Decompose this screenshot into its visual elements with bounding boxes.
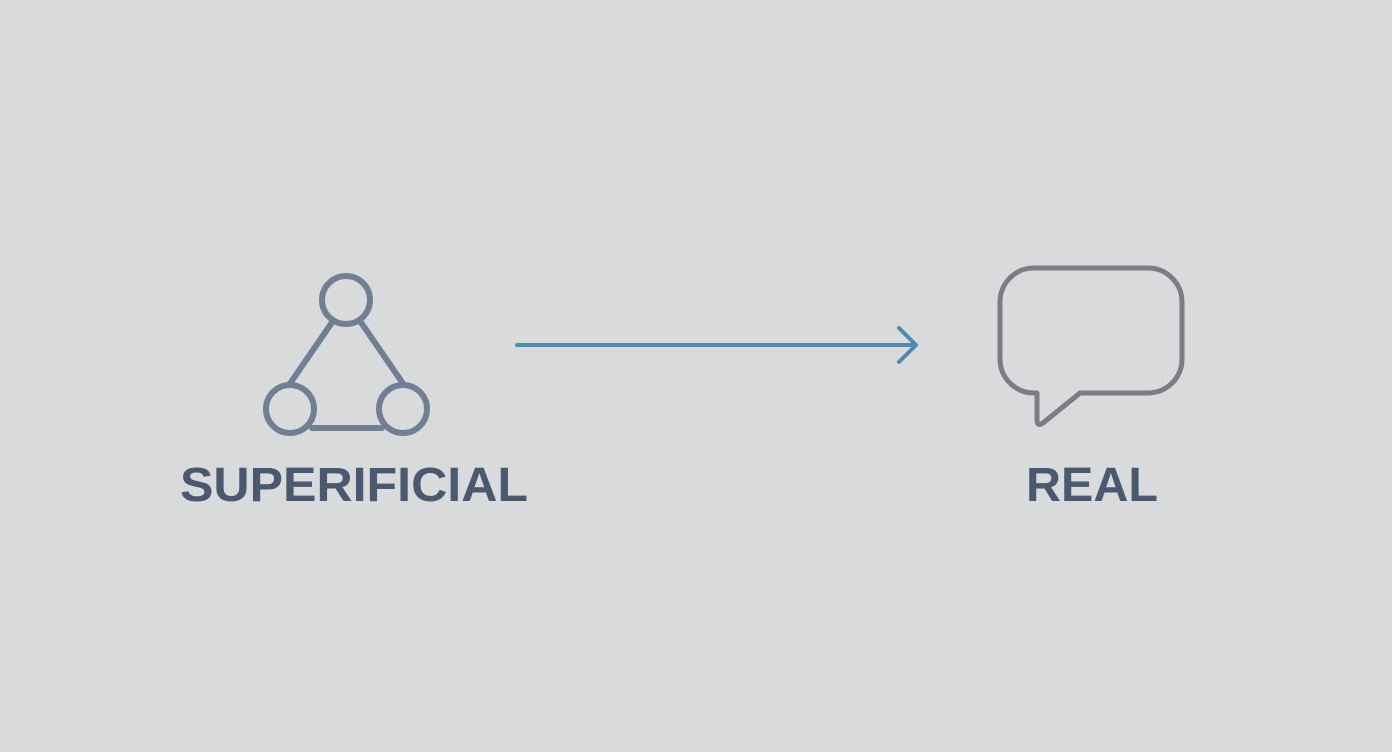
arrow	[517, 328, 916, 362]
icon: triangle of nodes	[266, 276, 427, 433]
icon: speech bubble	[1000, 268, 1182, 424]
label: real: REAL	[1026, 459, 1158, 512]
label: superficial: SUPERIFICIAL	[180, 459, 528, 512]
